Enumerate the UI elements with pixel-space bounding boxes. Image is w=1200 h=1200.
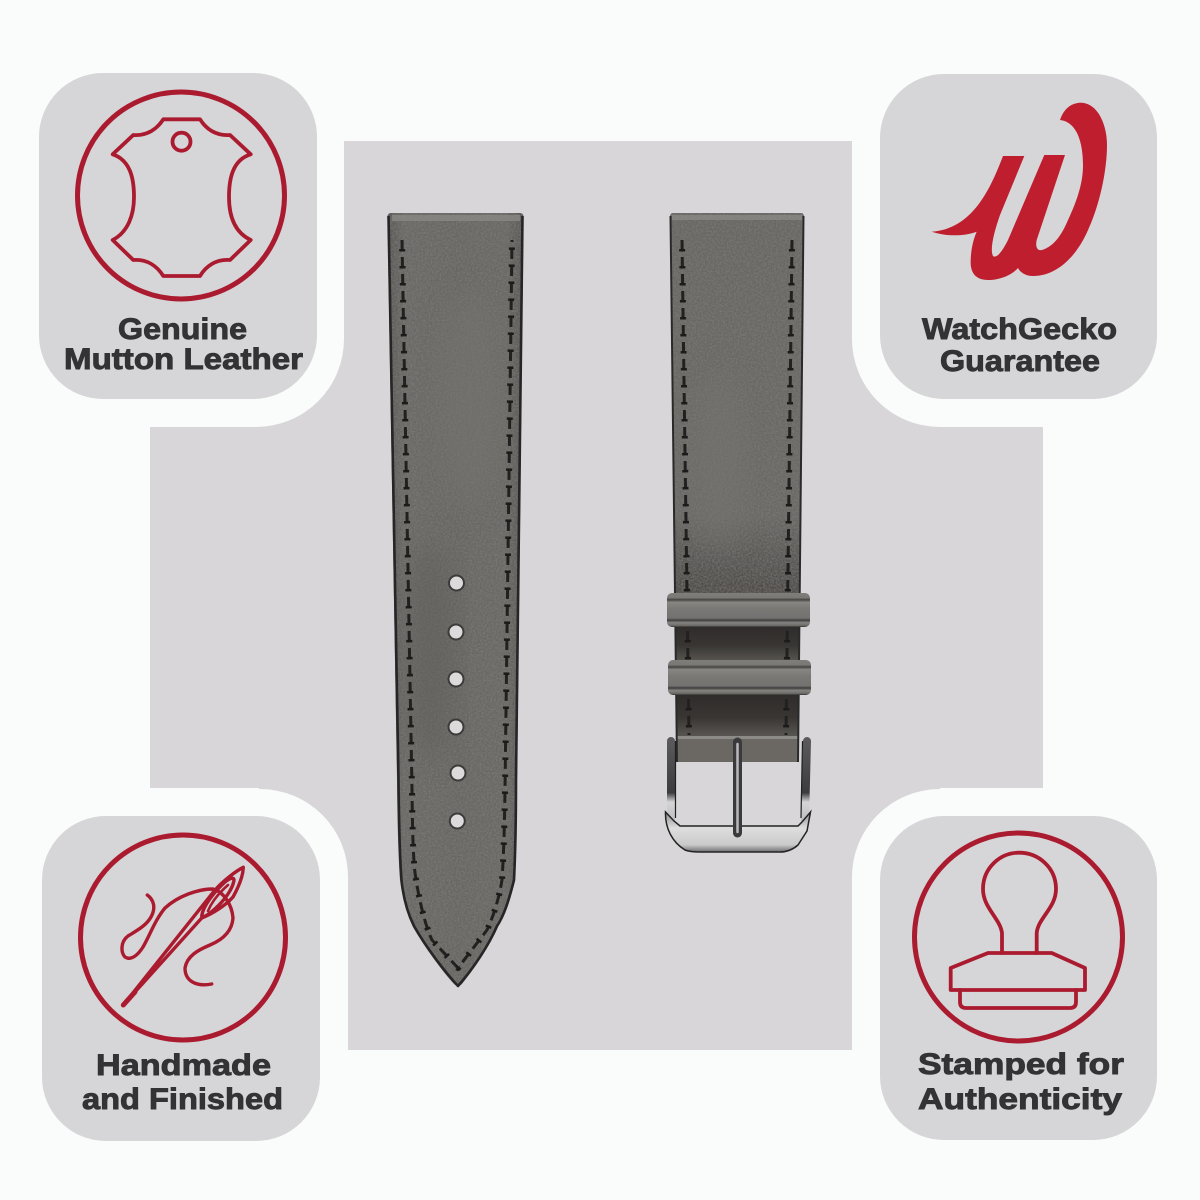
label: Handmade and Finished: [82, 1049, 283, 1116]
label: Handmade and Finished: and Finished: [82, 1083, 283, 1116]
label: WatchGecko Guarantee: [922, 313, 1117, 378]
upper strap keeper: [667, 593, 810, 627]
buckle: [665, 741, 810, 852]
right strap stitching: [682, 240, 792, 735]
panel: WatchGecko guarantee: [852, 48, 1182, 427]
central cross-shaped grey backdrop: [150, 141, 1043, 1050]
label: Genuine Mutton Leather: Genuine: [118, 313, 247, 346]
lower strap keeper: [668, 660, 811, 695]
icon: needle and thread in circle: [80, 835, 286, 1040]
long watch strap with holes: [388, 213, 524, 986]
label: Handmade and Finished: Handmade: [96, 1049, 271, 1082]
panel: genuine mutton leather: [14, 48, 344, 427]
short watch strap with keepers and buckle: [665, 213, 811, 852]
label: Stamped for Authenticity: Authenticity: [918, 1083, 1122, 1116]
buckle tongue: [733, 742, 742, 833]
icon: rubber stamp in circle: [914, 833, 1122, 1041]
icon: leather hide in circle: [78, 92, 284, 299]
panel: handmade and finished: [16, 789, 348, 1167]
label: Genuine Mutton Leather: Mutton Leather: [64, 343, 303, 376]
icon: WatchGecko W logo: [932, 103, 1107, 280]
stitching: [402, 240, 512, 968]
panel: stamped for authenticity: [852, 789, 1182, 1167]
label: Stamped for Authenticity: Stamped for: [918, 1048, 1124, 1081]
label: WatchGecko Guarantee: Guarantee: [940, 345, 1100, 378]
label: WatchGecko Guarantee: WatchGecko: [922, 313, 1117, 346]
strap holes: [448, 576, 466, 828]
label: Genuine Mutton Leather: [64, 313, 303, 376]
label: Stamped for Authenticity: [918, 1048, 1124, 1116]
